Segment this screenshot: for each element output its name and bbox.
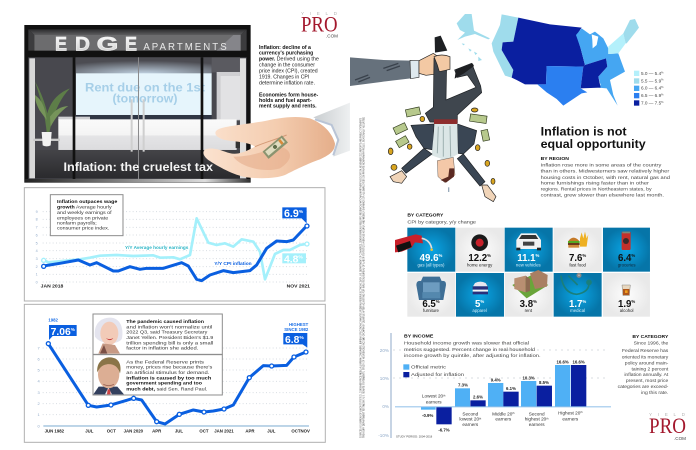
- quote box: Yellen: The pandemic caused inflation: [126, 319, 204, 325]
- quote box: Rand Paul: [93, 355, 222, 395]
- quote box: Rand Paul: Inflation is caused by too much: [126, 375, 211, 381]
- Mountain / plains region: [502, 18, 585, 84]
- y axis labels: 6: [38, 356, 41, 361]
- intro text block: change in the consumer: [259, 62, 315, 68]
- line: CPI inflation: [43, 226, 307, 281]
- map legend: %: [661, 70, 664, 74]
- quote box: Yellen: factor in inflation she added.: [126, 346, 198, 352]
- y axis of income chart: 0%: [382, 404, 389, 409]
- head and hands: [390, 157, 496, 202]
- tile backgrounds: [407, 228, 650, 317]
- tile: gas: 49.6: [420, 253, 438, 264]
- x axis labels: OCT: [107, 428, 116, 433]
- intro text block: 1919. Changes in CPI: [259, 74, 309, 80]
- category heading: [407, 213, 476, 226]
- by category text: categories are exceed-: [618, 384, 669, 390]
- icon: gas nozzle: [395, 234, 433, 252]
- quintile labels: Second: [529, 411, 545, 416]
- icon: stethoscope: [561, 274, 591, 294]
- logo: Yield Pro top: PRO: [301, 12, 338, 36]
- x axis labels: OCT: [199, 428, 209, 433]
- text box: wage growth note: [50, 195, 123, 236]
- icon: car: [516, 233, 541, 250]
- panel: CPI by category tiles: fast food: [569, 262, 587, 267]
- y axis labels: 5: [38, 367, 41, 372]
- x axis labels: JUL: [85, 428, 94, 433]
- by category text: [618, 334, 669, 396]
- callout: 6.8% highest since 1982: [283, 322, 309, 348]
- category heading: CPI by category, y/y change: [407, 220, 476, 226]
- callout: 6.8% highest since 1982: %: [299, 335, 304, 341]
- callout: 7.06%: %: [71, 327, 76, 332]
- bar values: 10.3%: [523, 375, 535, 380]
- bars legend: [403, 364, 464, 378]
- by region text: Inflation rose more in some areas of the country: [541, 163, 662, 169]
- tile: apparel: %: [480, 299, 484, 304]
- icon: burger and fries: [568, 232, 588, 248]
- by region text: contrast, grew slower than elsewhere last month.: [541, 193, 664, 199]
- icon: open hand with cash: [203, 103, 350, 178]
- quintile labels: earners: [495, 417, 512, 422]
- icon: home energy: [471, 234, 488, 251]
- icon: apartment buildings: [512, 270, 548, 298]
- panel: CPI by category tiles: home energy: [467, 262, 493, 267]
- y axis of income chart: -10%: [378, 433, 389, 438]
- quintile labels: earners: [462, 422, 479, 427]
- tile: medical: 1.7: [569, 299, 582, 310]
- by region text: home furnishings rising faster than in other: [541, 181, 649, 187]
- quote box: Rand Paul: money, prices rise because there's: [126, 365, 213, 371]
- bar values: 6.1%: [506, 386, 516, 391]
- y axis labels: [38, 345, 41, 428]
- text box: wage growth note: and weekly earnings of: [57, 210, 112, 216]
- callout: 6.9%: 6.9: [284, 208, 299, 220]
- y axis labels: 7: [38, 345, 41, 350]
- intro text block: power.: [259, 56, 276, 62]
- South Central region: [537, 66, 587, 106]
- tile: alcohol: %: [631, 299, 635, 304]
- portrait: Rand Paul: [93, 357, 124, 394]
- trousers and shoes: [425, 36, 482, 123]
- callout: 4.8%: %: [298, 254, 303, 260]
- quintile labels: earners: [529, 422, 545, 427]
- panel: CPI by category tiles: apparel: [472, 308, 487, 313]
- by category text: Since 1996, the: [634, 341, 669, 347]
- category heading: BY CATEGORY: [407, 213, 444, 219]
- by category text: policy around main-: [625, 361, 669, 367]
- store sign name: G: [97, 34, 118, 55]
- quintile labels: Second: [462, 411, 479, 416]
- falling coins: [388, 108, 495, 184]
- text box: wage growth note: employees on private: [57, 215, 109, 221]
- panel: income bar chart: [395, 334, 669, 438]
- panel: CPI by category tiles: gas (all types): [418, 262, 445, 267]
- tile: fast food: %: [582, 253, 586, 258]
- quintile labels: Lowest 20: [422, 394, 443, 399]
- tile: new vehicles: %: [536, 253, 540, 258]
- storefront illustration: [24, 25, 251, 183]
- quote box: Yellen: and inflation won't normalize until: [126, 324, 212, 330]
- callout: 7.06%: 1982: [48, 318, 59, 323]
- quintile labels: earners: [562, 417, 579, 422]
- y axis of income chart: 10%: [380, 376, 389, 381]
- x axis labels: OCTNOV: [291, 428, 310, 433]
- by category text: taining 2 percent: [631, 366, 669, 372]
- y axis labels: 7: [36, 226, 38, 230]
- text box: wage growth note: nonfarm payrolls;: [57, 220, 97, 226]
- x axis labels: APR: [245, 428, 255, 433]
- callout: 6.9%: [282, 207, 307, 223]
- quintile labels: th: [580, 410, 583, 414]
- intro text block: determine inflation rate.: [259, 80, 315, 86]
- Midwest and South Atlantic: [576, 28, 625, 106]
- by category text: ing this rate.: [641, 390, 668, 396]
- series label: CPI: Y/Y CPI inflation: [214, 261, 252, 266]
- plant: [33, 82, 70, 146]
- fine print sources, rotated: TREASURY DEPARTMENT TESTIMONY, U.S. SENATE STATEMENTS, STUDY OF HOUSEHOLD INCOME GROWTH BY QUINTILE AFTER ADJUSTING FOR INFLATION, BUREAU OF LABOR STATISTICS AVERAGE HOURLY AND WEEKLY EARNINGS OF ALL EMPLOYEES ON PRIVATE NONFARM PAYROLLS, SEASONALLY ADJUSTED: [362, 117, 366, 438]
- line: average hourly earnings: [43, 218, 307, 279]
- quintile labels: highest 20: [525, 417, 546, 422]
- y axis labels: 4: [36, 249, 38, 253]
- tile: apparel: 5: [475, 299, 480, 310]
- bars: [421, 365, 570, 410]
- map legend: %: [661, 92, 664, 96]
- store sign name: D: [75, 34, 90, 55]
- income text: metrics suggested. Percent change in real household: [404, 347, 535, 353]
- bar values: 2.6%: [473, 395, 483, 400]
- intro text block: Derived using the: [277, 56, 319, 62]
- Alaska and Hawaii: [457, 14, 490, 61]
- map legend: %: [661, 85, 664, 89]
- jacket and shirt: [402, 119, 485, 186]
- store sign name: [55, 34, 137, 55]
- by category text: oriented its monetary: [622, 355, 669, 361]
- y axis labels: 2: [36, 265, 38, 269]
- x axis labels: JAN 2021: [214, 428, 234, 433]
- logo: Yield Pro bottom: PRO: [649, 413, 686, 438]
- bar values: 8.5%: [539, 380, 549, 385]
- by region text: than in others. Midwesterners saw relatively higher: [541, 169, 670, 175]
- quintile labels: th: [546, 416, 549, 420]
- panel: CPI by category tiles: furniture: [423, 308, 440, 313]
- panel: CPI by category tiles: medical: [570, 308, 585, 313]
- callout: 6.9%: %: [299, 209, 304, 215]
- map legend: 6.0 — 6.4: [641, 86, 661, 91]
- quintile labels: th: [512, 411, 515, 415]
- bar values: 16.6%: [557, 360, 569, 365]
- income text: income growth by quintile, after adjusting for inflation.: [404, 353, 541, 359]
- logo: Yield Pro top: .COM: [326, 34, 338, 38]
- panel: CPI since 1982 line chart: [24, 304, 325, 442]
- store sign name: E: [125, 34, 137, 55]
- tile: groceries: 6.4: [618, 253, 631, 264]
- callout: 4.8%: 4.8: [284, 254, 298, 265]
- by category text: present, most price: [626, 378, 669, 384]
- icon: cash bundle: [263, 135, 288, 159]
- icon: man held upside down shaking out money: [350, 36, 496, 202]
- quote box: Yellen: Janet Yellen. President Biden's $1.9: [126, 335, 214, 341]
- panel: CPI by category tiles: new vehicles: [516, 262, 541, 267]
- map legend: 5.5 — 5.9: [641, 78, 661, 83]
- East South Central: [581, 58, 607, 88]
- window poster text: Rent due on the 1st: [85, 81, 205, 95]
- intro text block: price index (CPI), created: [259, 68, 318, 74]
- panel: CPI by category tiles: [395, 213, 650, 317]
- callout: 6.8% highest since 1982: 6.8: [285, 335, 299, 346]
- intro text block: Inflation: decline of a: [259, 45, 311, 51]
- portrait: Janet Yellen: [95, 318, 122, 354]
- by region text: regions. Rental prices in Northeastern states, by: [541, 187, 652, 193]
- line: CPI: [48, 344, 306, 424]
- income text: [404, 334, 541, 359]
- store sign name: E: [55, 34, 67, 55]
- panel: CPI by category tiles: rent: [525, 308, 533, 313]
- text box: wage growth note: Inflation outpaces wage: [57, 199, 118, 205]
- icon: whiskey glass: [622, 285, 630, 296]
- quote box: Rand Paul: As the Federal Reserve prints: [126, 359, 205, 365]
- bars legend: Adjusted for inflation: [411, 372, 464, 378]
- intro text block: currency's purchasing: [259, 51, 313, 57]
- window poster text: (tomorrow): [112, 92, 178, 106]
- logo: Yield Pro bottom: .COM: [674, 436, 686, 441]
- quote box: Yellen: [93, 314, 222, 354]
- income text: BY INCOME: [404, 334, 434, 340]
- logo: Yield Pro top: YIELD: [301, 11, 338, 16]
- arm holding ankle: [350, 53, 441, 86]
- tile: home energy: %: [487, 253, 491, 258]
- bar values: [422, 360, 585, 432]
- heading: [541, 124, 646, 151]
- y axis of income chart: 20%: [380, 348, 389, 353]
- x axis labels: NOV 2021: [287, 284, 311, 289]
- callout: 6.8% highest since 1982: SINCE 1982: [284, 327, 309, 332]
- x axis labels: JUL: [267, 428, 276, 433]
- tile: furniture: %: [436, 299, 440, 304]
- New England: [623, 19, 639, 43]
- quintile labels: Highest 20: [558, 410, 580, 415]
- y axis of income chart: [378, 333, 605, 438]
- quote box: Rand Paul: government spending and too: [126, 381, 202, 387]
- heading: equal opportunity: [541, 137, 646, 151]
- y axis labels: 9: [36, 210, 38, 214]
- x axis labels: APR: [152, 428, 162, 433]
- tile: rent: %: [533, 299, 537, 304]
- tile: fast food: 7.6: [569, 253, 582, 264]
- tile: home energy: 12.2: [468, 253, 487, 264]
- x axis labels: [41, 284, 311, 289]
- quintile labels: earners: [426, 399, 442, 404]
- callout: 7.06%: [48, 318, 77, 340]
- y axis labels: 0: [38, 423, 41, 428]
- y axis labels: 0: [36, 280, 38, 284]
- tile: medical: %: [582, 299, 586, 304]
- falling bills: [393, 107, 490, 148]
- intro text block: Economies form house-: [259, 92, 319, 98]
- y axis labels: 8: [36, 218, 38, 222]
- series label: earnings: Y/Y Average hourly earnings: [125, 245, 189, 250]
- y axis labels: 3: [36, 257, 38, 261]
- by category text: BY CATEGORY: [632, 334, 669, 340]
- callout: 6.8% highest since 1982: HIGHEST: [289, 322, 309, 327]
- bar values: -0.9%: [422, 413, 433, 418]
- bar values: 9.4%: [491, 377, 501, 382]
- x axis labels: JUN 1982: [45, 428, 65, 433]
- x axis labels: JAN 2020: [124, 428, 144, 433]
- y axis labels: 6: [36, 233, 38, 237]
- y axis labels: 1: [36, 273, 38, 277]
- quintile labels: [422, 393, 583, 427]
- map legend: 6.5 — 6.9: [641, 93, 661, 98]
- icon: groceries can: [622, 232, 631, 250]
- y axis labels: 2: [38, 401, 41, 406]
- map legend: [634, 70, 664, 106]
- x axis labels: [45, 428, 310, 433]
- heading: Inflation is not: [541, 124, 627, 138]
- icon: armchair: [416, 277, 446, 300]
- intro text block: ment supply and rents.: [259, 104, 317, 110]
- text box: wage growth note: consumer price index.: [57, 226, 109, 232]
- bar values: -6.7%: [438, 427, 450, 432]
- bar values: 7.3%: [458, 383, 468, 388]
- y axis labels: [36, 210, 38, 284]
- intro text block: [259, 45, 319, 110]
- study period note: STUDY PERIOD: 2004-2018: [396, 434, 433, 438]
- intro text block: holds and fuel apart-: [259, 98, 312, 104]
- tile: rent: 3.8: [520, 299, 533, 310]
- by region text: housing costs in October, with rent, natural gas and: [541, 175, 670, 181]
- map: inflation by U.S. region: [457, 14, 670, 199]
- storefront title: Inflation: the cruelest tax: [64, 160, 213, 174]
- y axis labels: 4: [38, 379, 41, 384]
- tile: furniture: 6.5: [422, 299, 436, 310]
- y axis labels: 1: [38, 412, 41, 417]
- bars legend: Official metric: [411, 365, 447, 371]
- quote box: Yellen: 2022 Q3, said Treasury Secretary: [126, 330, 208, 336]
- fine print sources, rotated: [358, 117, 366, 438]
- hand grip: [434, 55, 450, 72]
- tile: new vehicles: 11.1: [517, 253, 536, 264]
- window poster text: [85, 81, 205, 106]
- by region text: [541, 156, 670, 199]
- bar values: 16.6%: [573, 360, 585, 365]
- tile: alcohol: 1.9: [618, 299, 631, 310]
- icon: apparel stack: [473, 282, 488, 294]
- by region text: BY REGION: [541, 156, 569, 162]
- West region: [492, 14, 518, 78]
- panel: CPI by category tiles: alcohol: [620, 308, 634, 313]
- by category text: Federal Reserve has: [622, 348, 669, 354]
- map legend: 7.0 — 7.5: [641, 101, 661, 106]
- store sign subtitle: APARTMENTS: [143, 42, 227, 53]
- quote box: Yellen: trillion spending bill is only a small: [126, 340, 213, 346]
- by category text: inflation annually. At: [624, 372, 669, 378]
- callout: 7.06%: 7.06: [51, 327, 71, 338]
- map legend: %: [661, 78, 664, 82]
- panel: CPI by category tiles: groceries: [618, 262, 636, 267]
- y axis labels: 3: [38, 390, 41, 395]
- quintile labels: th: [443, 393, 446, 397]
- text box: wage growth note: growth Average hourly: [57, 204, 112, 210]
- Mid-Atlantic: [608, 33, 626, 54]
- map legend: %: [661, 100, 664, 104]
- quintile labels: Middle 20: [492, 411, 512, 416]
- data markers: [46, 342, 308, 424]
- quote box: Rand Paul: much debt, said Sen. Rand Paul.: [126, 386, 207, 392]
- map legend: 5.0 — 5.4: [641, 71, 661, 76]
- quintile labels: th: [479, 416, 482, 420]
- income text: Household income growth was slower that official: [404, 341, 529, 347]
- callout: 4.8%: [282, 253, 306, 265]
- logo: Yield Pro bottom: YIELD: [649, 412, 686, 417]
- panel: wage growth line chart: [24, 188, 325, 301]
- quintile labels: lowest 20: [459, 417, 479, 422]
- x axis labels: JUL: [175, 428, 183, 433]
- x axis labels: JAN 2018: [41, 284, 64, 289]
- tile: groceries: %: [631, 253, 635, 258]
- quote box: Rand Paul: an artificial stimulus for demand.: [126, 370, 209, 376]
- tile: gas: %: [438, 253, 442, 258]
- y axis labels: 5: [36, 241, 38, 245]
